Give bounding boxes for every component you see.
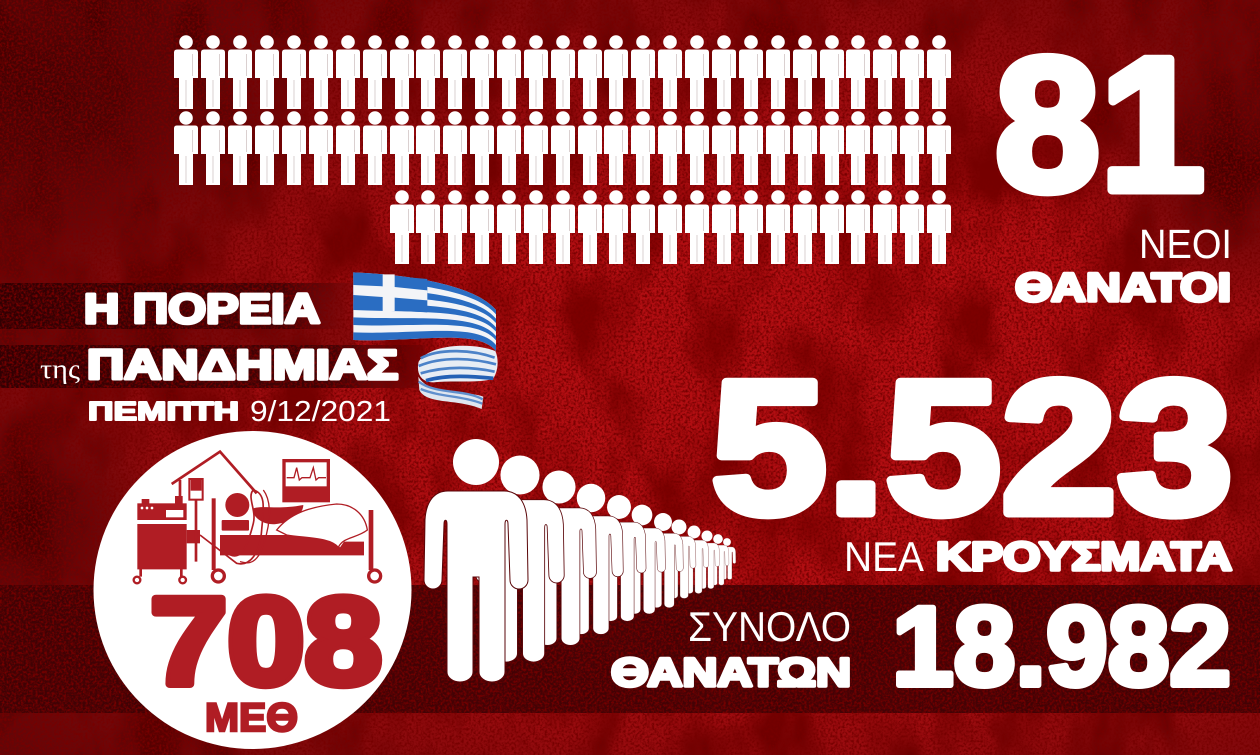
label: ΝΕΑ: ΝΕΑ: [844, 533, 924, 580]
row 2: [174, 111, 951, 185]
label: ΜΕΘ: ΜΕΘ: [205, 696, 298, 740]
people grid: 81 new deaths: [174, 35, 951, 264]
label: ΘΑΝΑΤΟΙ: ΘΑΝΑΤΟΙ: [1015, 266, 1231, 310]
title: Η ΠΟΡΕΙΑ: Η ΠΟΡΕΙΑ: [84, 285, 320, 332]
dark band: title: [0, 283, 425, 388]
icon: Greek flag ribbon: [353, 272, 498, 409]
row 1: [174, 35, 951, 109]
label: ΣΥΝΟΛΟ: ΣΥΝΟΛΟ: [688, 603, 851, 650]
title: ΠΑΝΔΗΜΙΑΣ: ΠΑΝΔΗΜΙΑΣ: [87, 341, 398, 388]
dark band: total deaths: [0, 585, 1260, 713]
icon: queue of people: [424, 439, 736, 682]
title: της: της: [40, 354, 80, 384]
number: 5.523: 5.523: [711, 342, 1233, 554]
label: ΝΕΟΙ: ΝΕΟΙ: [1139, 221, 1232, 267]
icon: hospital bed and equipment: [134, 452, 381, 583]
number: 81: 81: [995, 19, 1205, 231]
number: 18.982: 18.982: [892, 584, 1231, 709]
date: 9/12/2021: 9/12/2021: [250, 396, 391, 428]
ribbon main: [353, 272, 496, 351]
row 3: [390, 190, 951, 264]
ribbon tail: [418, 377, 483, 409]
panel: ICU beds circle: [94, 431, 412, 749]
number: 708: 708: [150, 573, 382, 711]
ribbon loop: [418, 346, 498, 382]
date label: ΠΕΜΠΤΗ: ΠΕΜΠΤΗ: [88, 396, 239, 426]
label: ΚΡΟΥΣΜΑΤΑ: ΚΡΟΥΣΜΑΤΑ: [936, 535, 1232, 579]
canton: [353, 272, 427, 312]
label: ΘΑΝΑΤΩΝ: ΘΑΝΑΤΩΝ: [611, 651, 851, 695]
